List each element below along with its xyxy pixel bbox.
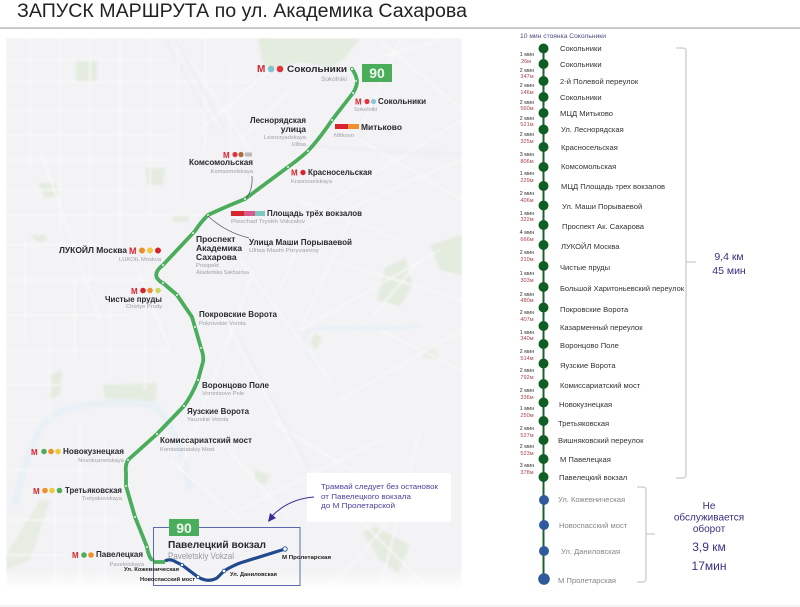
label: Павелецкий вокзал — [168, 539, 266, 561]
stop names: Проспект Ак. Сахарова — [562, 222, 645, 231]
map background — [6, 38, 462, 590]
segment distances: 325м — [520, 139, 534, 145]
stop names: Комсомольская — [561, 162, 616, 171]
stop names: Ул. Маши Порываевой — [562, 202, 642, 211]
stop names: Сокольники — [560, 44, 602, 53]
label: Комсомольская: Komsomolskaya — [210, 169, 254, 175]
segment times: 2 мин — [520, 250, 534, 256]
label: Сокольники metro: М — [257, 64, 265, 75]
segment distances: 406м — [520, 198, 534, 204]
label: Красносельская: Красносельская — [308, 167, 372, 177]
label: Яузские Ворота: Yauzskie Vorota — [187, 417, 229, 423]
leader lines — [208, 176, 252, 238]
segment times: 1 мин — [520, 211, 534, 217]
label: Комиссариатский мост: Komissariatskiy Most — [160, 447, 215, 453]
segment distances: 336м — [520, 395, 534, 401]
label: Третьяковская: Tretyakovskaya — [82, 496, 123, 502]
stop names: 2-й Полевой переулок — [560, 77, 639, 86]
summary: unserved section — [674, 501, 744, 573]
label: Комсомольская: Комсомольская — [189, 157, 253, 167]
bracket: served section — [676, 48, 696, 478]
stop names: Сокольники — [560, 60, 602, 69]
stop names: М Павелецкая — [560, 455, 611, 464]
inset box: Paveletsky — [154, 528, 300, 586]
label: Чистые пруды — [105, 287, 162, 310]
segment distances: 514м — [520, 356, 534, 362]
label: Воронцово Поле: Воронцово Поле — [202, 380, 269, 390]
segment times: 2 мин — [520, 100, 534, 106]
segment times: 2 мин — [520, 388, 534, 394]
segment times: 1 мин — [520, 406, 534, 412]
segment distances: 666м — [520, 237, 534, 243]
segment distances: 378м — [520, 470, 534, 476]
label: Проспект Академика Сахарова: Akademika Sakharova — [196, 270, 250, 276]
segment distances: 26м — [521, 59, 531, 65]
label: Павелецкая: Павелецкая — [96, 549, 143, 559]
label: Новокузнецкая: Novokuznetskaya — [78, 458, 125, 464]
river — [15, 403, 190, 505]
timeline stops: served — [538, 44, 548, 482]
timeline note: 10 мин стоянка Сокольники — [520, 33, 606, 40]
stop names: Воронцово Поле — [560, 341, 619, 350]
arrow: callout to inset — [268, 497, 314, 522]
segment times: 4 мин — [520, 230, 534, 236]
label: Леснорядская улица — [250, 115, 307, 148]
labels: tram stops: Новоспасский мост — [140, 576, 195, 583]
label: Павелецкая: М — [72, 551, 79, 560]
stop names: МЦД Площадь трех вокзалов — [561, 182, 665, 191]
segment times: 3 мин — [520, 152, 534, 158]
segment times: 2 мин — [520, 132, 534, 138]
stop names: Павелецкий вокзал — [559, 473, 627, 482]
label: Павелецкая: Paveletskaya — [110, 562, 145, 568]
labels: tram stops: Ул. Кожевническая — [124, 567, 179, 573]
route stops: green — [125, 67, 357, 563]
segment distances: 340м — [520, 336, 534, 342]
label: Сокольники MЦД: М — [355, 98, 362, 106]
label: Третьяковская: Третьяковская — [65, 485, 122, 495]
label: ЛУКОЙЛ Москва: ЛУКОЙЛ Москва — [59, 244, 127, 255]
segment times: 1 мин — [520, 330, 534, 336]
label: Павелецкая — [72, 549, 145, 568]
stop names: Красносельская — [561, 143, 618, 152]
stop names: Сокольники — [560, 93, 602, 102]
segment distances: 146м — [520, 90, 534, 96]
stop names: Ул. Даниловская — [561, 547, 620, 556]
label: Проспект Академика Сахарова: Prospekt — [196, 263, 219, 269]
label: ЛУКОЙЛ Москва: LUKOIL Moskva — [119, 257, 162, 263]
stop names: Третьяковская — [558, 419, 609, 428]
label: Павелецкий вокзал: Павелецкий вокзал — [168, 539, 266, 551]
segment times: 2 мин — [520, 191, 534, 197]
panel: route map — [6, 38, 462, 590]
segment distances: 560м — [520, 106, 534, 112]
summary: served section — [712, 251, 746, 277]
segment distances: 792м — [520, 375, 534, 381]
label: Красносельская: Krasnoselskaya — [291, 179, 333, 185]
label: Митьково — [334, 122, 402, 139]
label: Покровские Ворота: Pokrovskie Vorota — [199, 321, 246, 327]
segment distances: 303м — [520, 278, 534, 284]
streets — [6, 60, 440, 564]
label: ЛУКОЙЛ Москва: М — [129, 246, 136, 256]
summary: served section: 45 мин — [712, 265, 746, 277]
callout: до М Пролетарской — [321, 501, 395, 510]
label: Митьково: Митьково — [361, 122, 402, 132]
segment distances: 523м — [520, 451, 534, 457]
stop names: Новокузнецкая — [559, 400, 612, 409]
label: Сокольники metro — [257, 64, 347, 83]
stop names: Яузские Ворота — [560, 361, 616, 370]
stop names: Покровские Ворота — [560, 305, 629, 314]
label: Воронцово Поле — [202, 380, 269, 397]
label: Комсомольская: М — [223, 151, 230, 160]
summary: unserved section: оборот — [693, 523, 726, 535]
stop names: Вишняковский переулок — [558, 436, 644, 445]
segment times: 3 мин — [520, 463, 534, 469]
stop names: Казарменный переулок — [560, 323, 643, 332]
segment times: 1 мин — [520, 271, 534, 277]
stop names: ЛУКОЙЛ Москва — [561, 242, 620, 251]
label: Покровские Ворота: Покровские Ворота — [199, 309, 277, 319]
badge: route 90 top — [362, 64, 392, 82]
label: Леснорядская улица: улица — [281, 124, 306, 134]
segment distances: 521м — [520, 122, 534, 128]
label: Сокольники metro: Sokolniki — [321, 76, 347, 83]
stop names: Комиссариатский мост — [560, 381, 641, 390]
segment times: 2 мин — [520, 116, 534, 122]
callout: Трамвай следует без остановок — [321, 482, 439, 491]
summary: unserved section: обслуживается — [674, 512, 744, 524]
label: Комиссариатский мост — [160, 435, 252, 453]
stop names: Ул. Кожевническая — [558, 495, 625, 504]
label: Третьяковская — [33, 485, 123, 502]
summary: unserved section: 3,9 км — [692, 540, 726, 554]
label: Сокольники MЦД: Sokolniki — [354, 107, 377, 113]
stop names — [558, 44, 685, 585]
callout — [307, 473, 451, 522]
segment times: 2 мин — [520, 68, 534, 74]
label: Третьяковская: М — [33, 487, 40, 496]
label: Леснорядская улица: Ulitsa — [292, 142, 307, 148]
stop names: Чистые пруды — [560, 263, 610, 272]
label: Проспект Академика Сахарова: Академика — [196, 243, 242, 253]
labels: tram stops: Ул. Даниловская — [230, 572, 277, 578]
segment distances: 480м — [520, 298, 534, 304]
label: Проспект Академика Сахарова: Сахарова — [196, 252, 237, 262]
segment distances: 407м — [520, 317, 534, 323]
label: Митьково: Mitkovo — [334, 133, 354, 139]
stop names: Новоспасский мост — [559, 521, 628, 530]
label: Сокольники MЦД: Сокольники — [378, 96, 426, 106]
summary: served section: 9,4 км — [714, 251, 744, 263]
parks — [6, 38, 462, 573]
segment distances: 250м — [520, 413, 534, 419]
badge: route 90 bottom: 90 — [176, 520, 192, 536]
label: Покровские Ворота — [199, 309, 277, 327]
segment times: 2 мин — [520, 349, 534, 355]
label: Яузские Ворота — [187, 406, 249, 423]
summary: unserved section: 17мин — [692, 559, 726, 573]
label: Сокольники MЦД — [354, 96, 426, 113]
segment distances — [520, 59, 534, 476]
stop names: М Пролетарская — [558, 576, 616, 585]
label: Сокольники metro: Сокольники — [287, 64, 347, 75]
segment distances: 527м — [520, 433, 534, 439]
segment distances: 347м — [520, 74, 534, 80]
stop names: Ул. Леснорядская — [561, 125, 624, 134]
label: Красносельская — [291, 167, 372, 185]
label: Чистые пруды: М — [131, 287, 138, 296]
label: Улица Маши Порываевой: Улица Маши Порываевой — [249, 237, 352, 247]
label: ЛУКОЙЛ Москва — [59, 244, 162, 263]
label: Новокузнецкая: Новокузнецкая — [63, 446, 124, 456]
segment distances: 210м — [520, 257, 534, 263]
stop names: Большой Харитоньевский переулок — [560, 284, 685, 293]
segment times: 2 мин — [520, 426, 534, 432]
segment times: 2 мин — [520, 310, 534, 316]
label: Новокузнецкая: М — [31, 448, 38, 457]
label: Красносельская: М — [291, 168, 298, 178]
segment distances: 322м — [520, 217, 534, 223]
label: Леснорядская улица: Леснорядская — [250, 115, 306, 125]
route line: green — [126, 69, 357, 562]
segment times — [520, 52, 534, 469]
segment times: 1 мин — [520, 171, 534, 177]
label: Павелецкий вокзал: Paveletskiy Vokzal — [168, 551, 234, 561]
timeline stops: not served — [538, 495, 550, 585]
label: Проспект Академика Сахарова — [196, 234, 250, 276]
bracket: unserved section — [637, 487, 655, 582]
segment times: 1 мин — [520, 52, 534, 58]
label: Площадь трёх вокзалов: Площадь трёх вокзалов — [267, 208, 362, 218]
segment distances: 806м — [520, 159, 534, 165]
labels: tram stops — [124, 555, 331, 583]
summary: unserved section: Не — [703, 501, 716, 512]
label: Комиссариатский мост: Комиссариатский мост — [160, 435, 252, 445]
route line: blue — [165, 547, 287, 580]
segment times: 2 мин — [520, 368, 534, 374]
label: Площадь трёх вокзалов: Ploschad Tryokh Vokzalov — [231, 219, 305, 225]
labels: tram stops: М Пролетарская — [282, 555, 331, 561]
label: Чистые пруды: Chistye Prudy — [126, 304, 162, 310]
label: Яузские Ворота: Яузские Ворота — [187, 406, 249, 416]
label: Леснорядская улица: Lesnoryadskaya — [264, 135, 307, 141]
segment distances: 229м — [520, 178, 534, 184]
stop names: МЦД Митьково — [560, 109, 613, 118]
label: Улица Маши Порываевой — [249, 237, 352, 254]
segment times: 2 мин — [520, 83, 534, 89]
badge: route 90 bottom — [169, 519, 199, 536]
label: Площадь трёх вокзалов — [231, 208, 362, 225]
label: Проспект Академика Сахарова: Проспект — [196, 234, 235, 244]
label: Новокузнецкая — [31, 446, 125, 464]
segment times: 2 мин — [520, 444, 534, 450]
segment times: 2 мин — [520, 292, 534, 298]
badge: route 90 top: 90 — [369, 65, 385, 81]
title: ЗАПУСК МАРШРУТА по ул. Академика Сахарова — [17, 1, 467, 22]
panel: stop timeline — [520, 33, 746, 585]
timeline line — [542, 48, 544, 579]
callout: от Павелецкого вокзала — [321, 492, 412, 501]
label: Воронцово Поле: Vorontsovo Pole — [202, 391, 244, 397]
label: Комсомольская — [189, 151, 254, 175]
label: Чистые пруды: Чистые пруды — [105, 294, 162, 304]
label: Улица Маши Порываевой: Ulitsa Mashi Poryvaevoy — [249, 248, 319, 254]
